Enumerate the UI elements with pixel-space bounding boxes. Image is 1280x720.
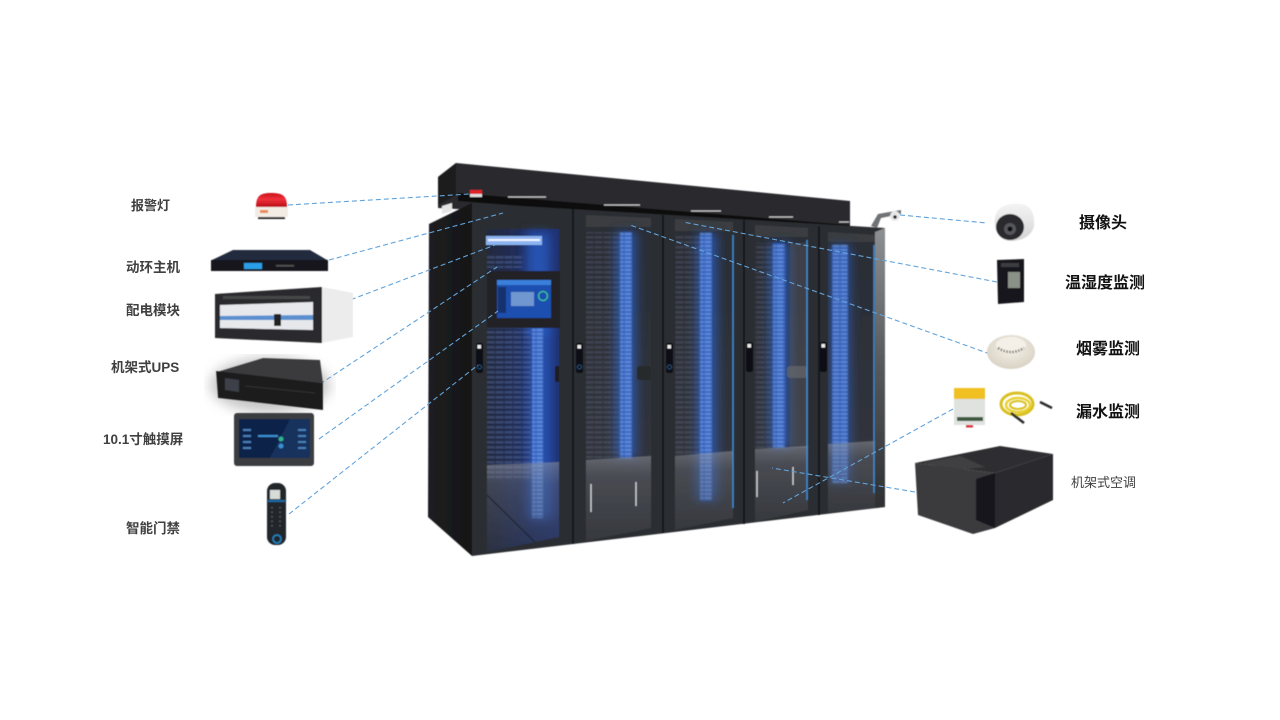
icon: dome camera: [995, 204, 1034, 241]
connector lines: [288, 194, 997, 514]
vertical blue light lines: [733, 235, 874, 508]
leak rope: [1001, 393, 1052, 423]
touch screen on door 1: [487, 271, 560, 328]
label: smoke monitoring: 烟雾监测: [1076, 340, 1140, 358]
icon: 10.1 inch touch screen: [234, 413, 314, 466]
label: rack air conditioner: 机架式空调: [1071, 475, 1136, 490]
icon: monitoring host: [211, 250, 328, 271]
cabinet: integrated rack row: [428, 163, 901, 556]
label: water leak monitoring: 漏水监测: [1076, 403, 1140, 421]
icon: rack UPS: [210, 357, 330, 413]
icon: rack air conditioner: [915, 446, 1053, 534]
label: smart door access: 智能门禁: [126, 520, 180, 536]
power module glow on door 1: [486, 236, 542, 245]
right edge post: [875, 228, 885, 508]
icon: smart door access: [267, 483, 286, 545]
icon: temperature and humidity monitor: [997, 259, 1024, 304]
label: monitoring host: 动环主机: [126, 259, 180, 275]
icon: power distribution module: [215, 287, 353, 343]
label: rack UPS: 机架式UPS: [111, 359, 179, 375]
label: touch screen: 10.1寸触摸屏: [103, 431, 183, 447]
camera on cabinet: [871, 210, 901, 228]
door gaps: [573, 209, 819, 544]
door 3 glass: [675, 219, 733, 534]
icon: alarm light: [255, 193, 288, 219]
icon: water leak controller and cable: [954, 388, 1052, 428]
label: alarm light: 报警灯: [131, 198, 170, 213]
door 1 glass: [487, 205, 560, 555]
alarm light on cabinet: [470, 190, 482, 197]
leak controller: [954, 388, 985, 428]
door 5 glass: [828, 232, 875, 517]
label: camera: 摄像头: [1079, 213, 1127, 232]
label: power distribution module: 配电模块: [126, 302, 180, 318]
label: temperature and humidity monitoring: 温湿度监测: [1065, 273, 1145, 292]
icon: smoke detector: [987, 335, 1035, 369]
door 2 glass: [586, 215, 651, 545]
cabinet front frame: [472, 203, 885, 556]
cabinet top hood: [438, 163, 850, 232]
cabinet left side panel: [428, 203, 472, 556]
door 4 glass: [755, 225, 808, 525]
door locks: [476, 342, 827, 373]
